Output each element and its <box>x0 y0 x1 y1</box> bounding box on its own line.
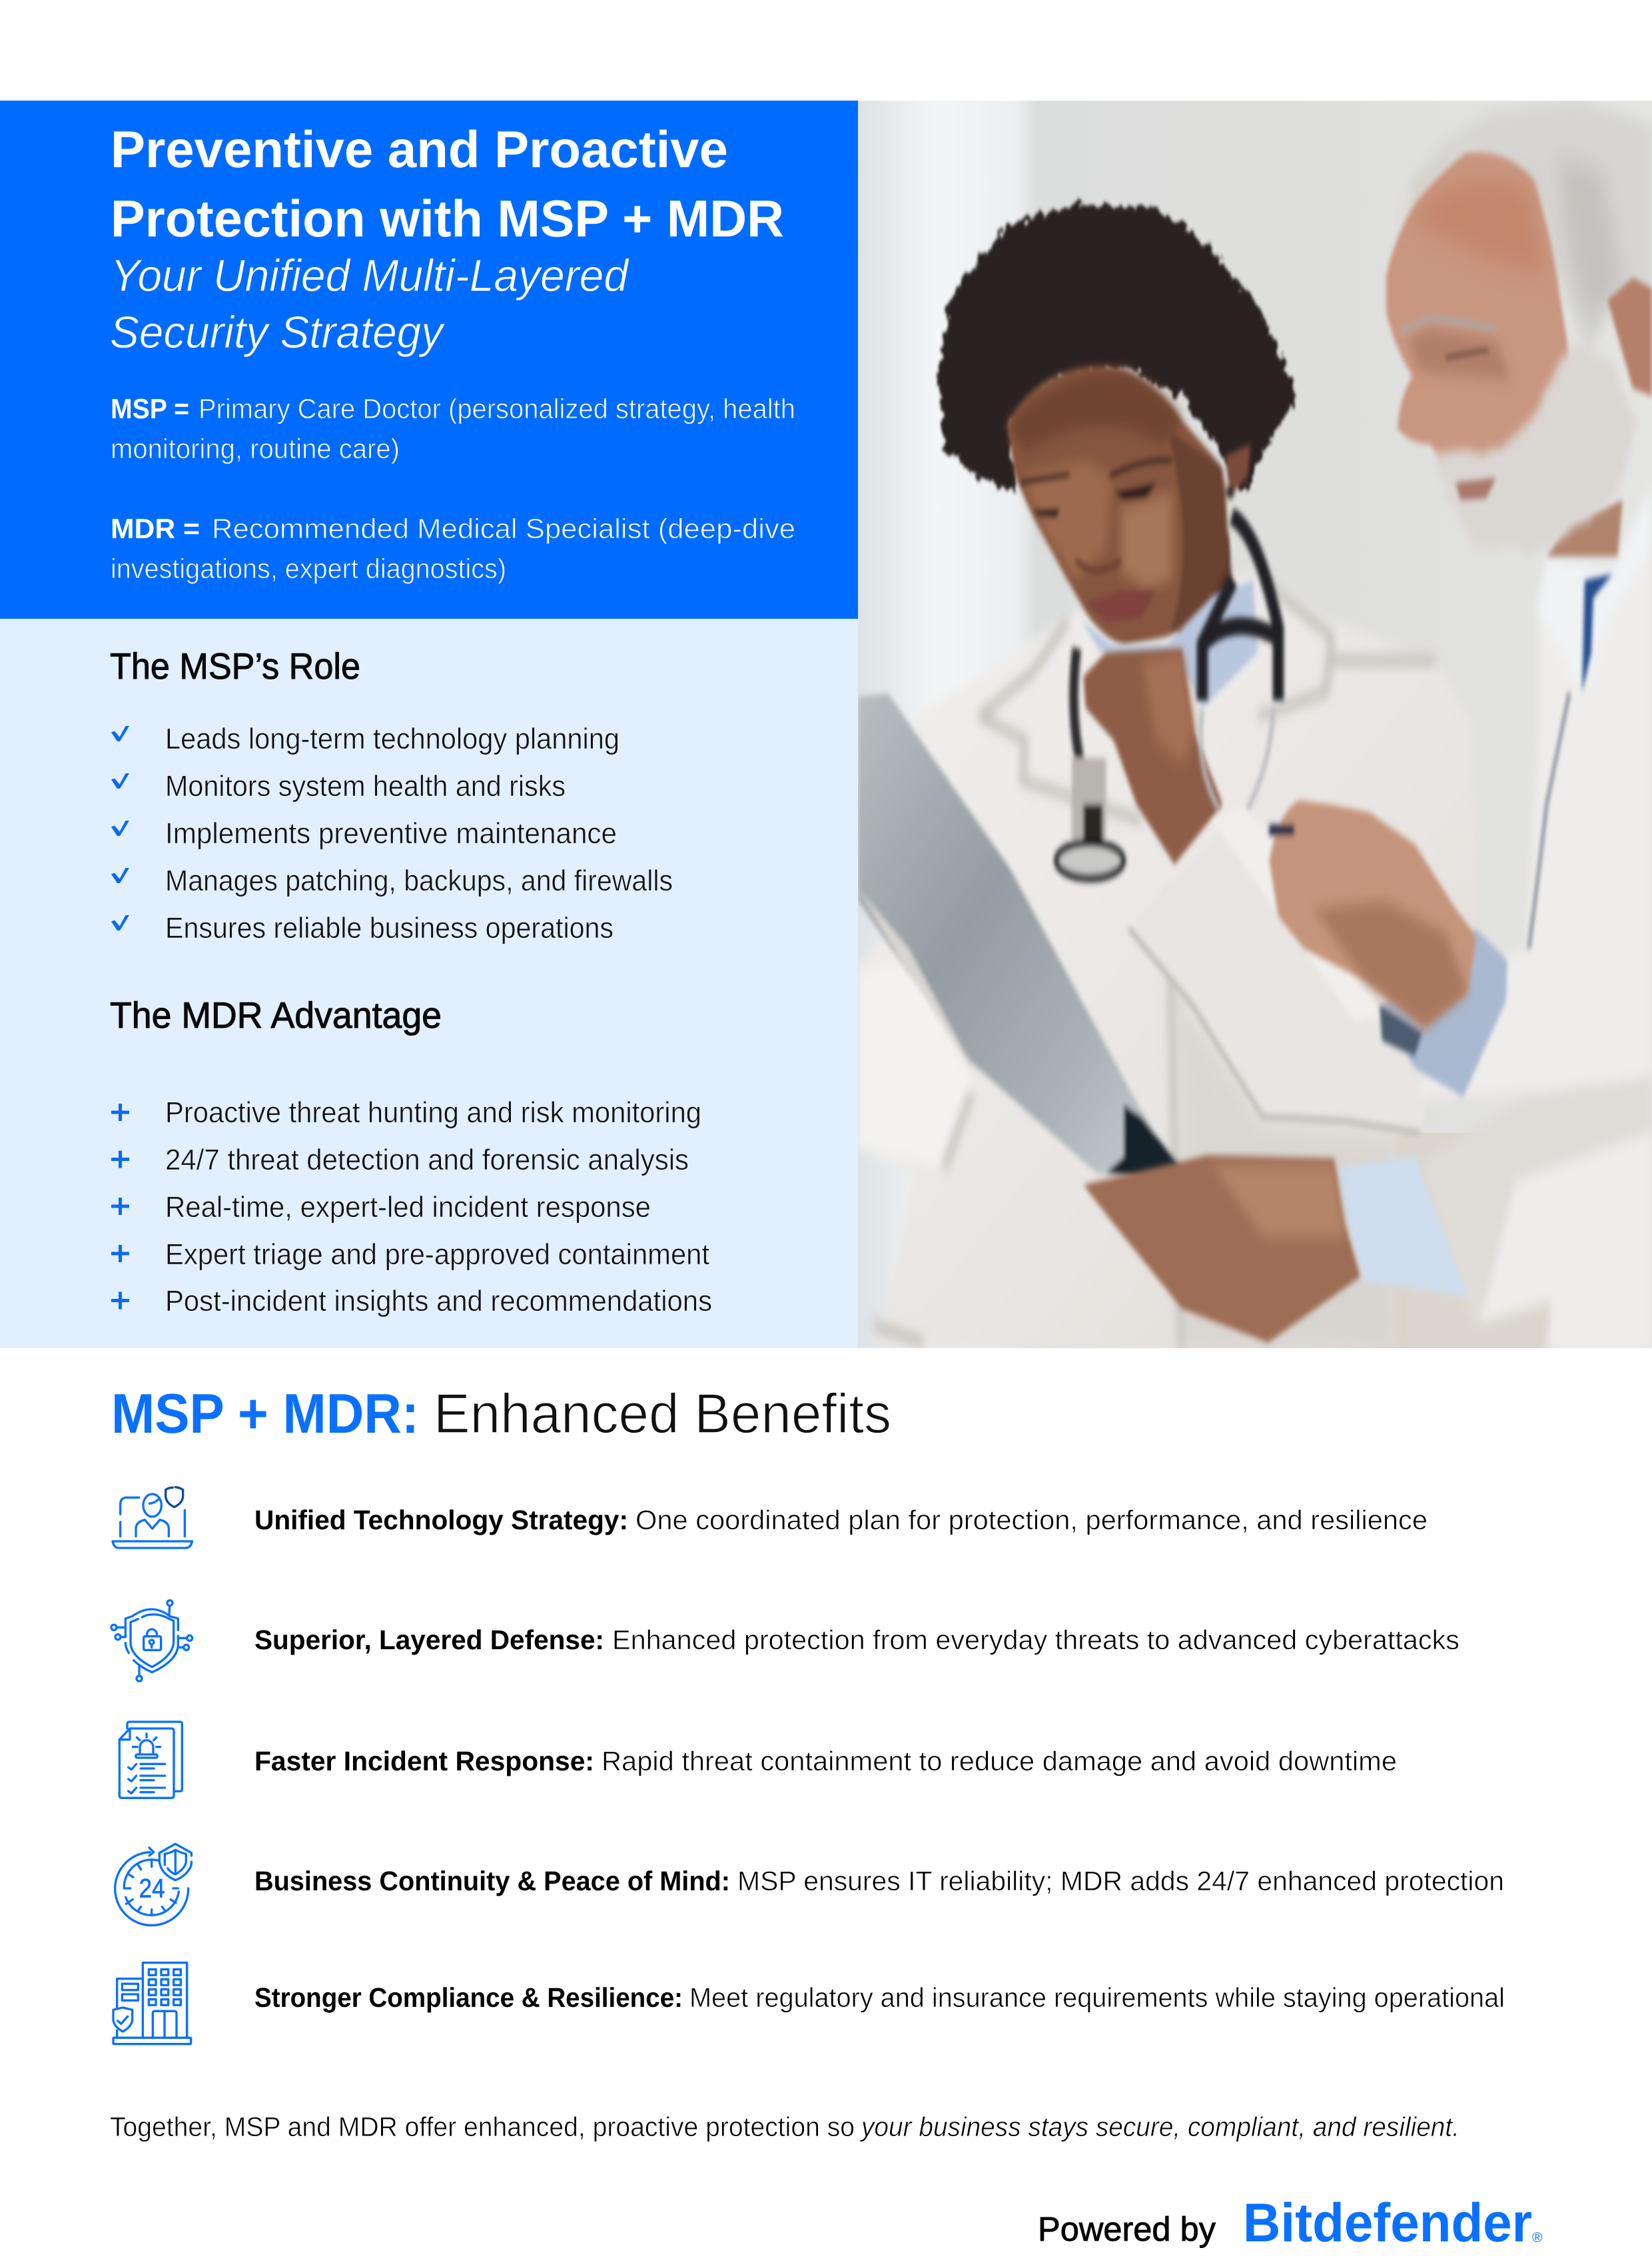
title: Preventive and Proactive <box>111 120 728 179</box>
photo: two doctors reviewing an x-ray <box>858 100 1652 1357</box>
man: hair <box>1408 100 1652 356</box>
icon: 24 hour clock with shield <box>115 1844 191 1926</box>
benefit row: compliance and resilience: Stronger Compliance & Resilience: <box>254 1982 683 2013</box>
woman: neck <box>1175 530 1235 636</box>
list: MSP role items: Manages patching, backups, and firewalls <box>165 865 673 897</box>
heading: enhanced benefits: MSP + MDR: <box>111 1382 419 1445</box>
woman: blouse <box>1080 580 1258 709</box>
subtitle <box>110 250 629 358</box>
man: lower cuff <box>1334 1157 1468 1297</box>
heading: The MDR Advantage: The MDR Advantage <box>110 994 442 1036</box>
benefit row: faster incident response: Faster Incident Response: <box>254 1746 594 1776</box>
heading: enhanced benefits <box>111 1382 891 1445</box>
footer: powered by Bitdefender <box>1038 2193 1543 2253</box>
benefit row: faster incident response: Rapid threat containment to reduce damage and avoid downtime <box>602 1746 1397 1776</box>
text block: MSP definition: MSP = <box>111 393 189 424</box>
list: MDR advantage items: Post-incident insights and recommendations <box>165 1285 712 1317</box>
footer: powered by Bitdefender: Powered by <box>1038 2210 1216 2248</box>
benefit row: compliance and resilience <box>113 1963 1505 2044</box>
benefit row: layered defense <box>111 1601 1459 1681</box>
man: coat shading <box>1529 692 1569 948</box>
list: MDR advantage items: 24/7 threat detection and forensic analysis <box>165 1144 689 1176</box>
woman: face <box>1007 366 1250 646</box>
text block: MDR definition <box>111 513 795 584</box>
woman: coat shading <box>873 580 1436 1349</box>
subtitle: Your Unified Multi-Layered <box>111 250 629 301</box>
man: tie <box>1582 574 1613 692</box>
benefit row: business continuity <box>115 1844 1504 1926</box>
icon: office building with shield <box>113 1963 191 2044</box>
stethoscope <box>1056 516 1278 878</box>
benefit row: unified technology strategy <box>113 1487 1428 1548</box>
title <box>111 120 784 248</box>
woman: thinking hand <box>1083 648 1222 865</box>
benefit row: business continuity: MSP ensures IT reliability; MDR adds 24/7 enhanced protection <box>737 1866 1504 1896</box>
man: neck <box>1547 500 1623 556</box>
list: MSP role items: Implements preventive maintenance <box>165 817 617 850</box>
text block: MSP definition: Primary Care Doctor (personalized strategy, health <box>199 393 795 424</box>
text block: MDR definition: investigations, expert diagnostics) <box>111 553 506 584</box>
list: MSP role items: Leads long-term technology planning <box>165 723 620 755</box>
icon: incident report with siren <box>119 1722 182 1798</box>
icon: check marks <box>111 726 129 931</box>
icon: person at laptop with shield <box>113 1487 193 1548</box>
man: coat <box>1415 484 1652 1352</box>
list: MSP role items <box>111 723 673 944</box>
heading: enhanced benefits: Enhanced Benefits <box>434 1382 891 1445</box>
list: MSP role items: Monitors system health and risks <box>165 770 566 803</box>
text block: MDR definition: MDR = <box>111 513 200 544</box>
text block: MSP definition <box>111 393 795 464</box>
benefit row: unified technology strategy: Unified Technology Strategy: <box>254 1505 628 1535</box>
x-ray film <box>858 694 1197 1190</box>
man: pointing hand <box>1269 801 1507 1096</box>
icon: plus marks <box>111 1104 129 1310</box>
heading: The MSP's Role: The MSP’s Role <box>110 645 360 687</box>
man: face <box>1386 152 1652 476</box>
logo: Bitdefender wordmark: Bitdefender <box>1243 2193 1532 2253</box>
list: MSP role items: Ensures reliable business operations <box>165 912 614 944</box>
man: beard <box>1430 340 1638 552</box>
closing statement: your business stays secure, compliant, and resilient. <box>859 2111 1459 2142</box>
panel: blue header <box>0 101 858 619</box>
title: Protection with MSP + MDR <box>111 189 784 248</box>
list: MDR advantage items <box>111 1096 712 1317</box>
man: lower hand <box>1083 1155 1360 1343</box>
benefit row: compliance and resilience: Meet regulatory and insurance requirements while staying operational <box>689 1982 1505 2013</box>
list: MDR advantage items: Expert triage and pre-approved containment <box>165 1238 709 1271</box>
woman: sleeve <box>1129 806 1430 1133</box>
woman: coat <box>858 572 1479 1352</box>
text block: MDR definition: Recommended Medical Specialist (deep-dive <box>212 513 795 544</box>
benefit row: layered defense: Superior, Layered Defense: <box>254 1625 604 1655</box>
benefit row: unified technology strategy: One coordinated plan for protection, performance, and resilience <box>635 1505 1428 1535</box>
woman: hair <box>939 204 1298 496</box>
list: MDR advantage items: Real-time, expert-led incident response <box>165 1191 651 1224</box>
list: MDR advantage items: Proactive threat hunting and risk monitoring <box>165 1096 701 1129</box>
closing statement <box>110 2111 1459 2142</box>
logo: Bitdefender wordmark: ® <box>1532 2230 1543 2245</box>
panel: light blue roles <box>0 619 858 1348</box>
benefit row: layered defense: Enhanced protection from everyday threats to advanced cyberattacks <box>612 1625 1459 1655</box>
subtitle: Security Strategy <box>110 307 446 358</box>
benefit row: business continuity: Business Continuity & Peace of Mind: <box>254 1866 730 1896</box>
closing statement: Together, MSP and MDR offer enhanced, proactive protection so <box>110 2111 855 2142</box>
icon: shield with lock and circuits <box>111 1601 193 1681</box>
icon: 24 hour clock with shield: 24 <box>139 1873 165 1903</box>
text block: MSP definition: monitoring, routine care) <box>111 433 400 464</box>
benefit row: faster incident response <box>119 1722 1397 1798</box>
wall background <box>858 100 1652 1352</box>
